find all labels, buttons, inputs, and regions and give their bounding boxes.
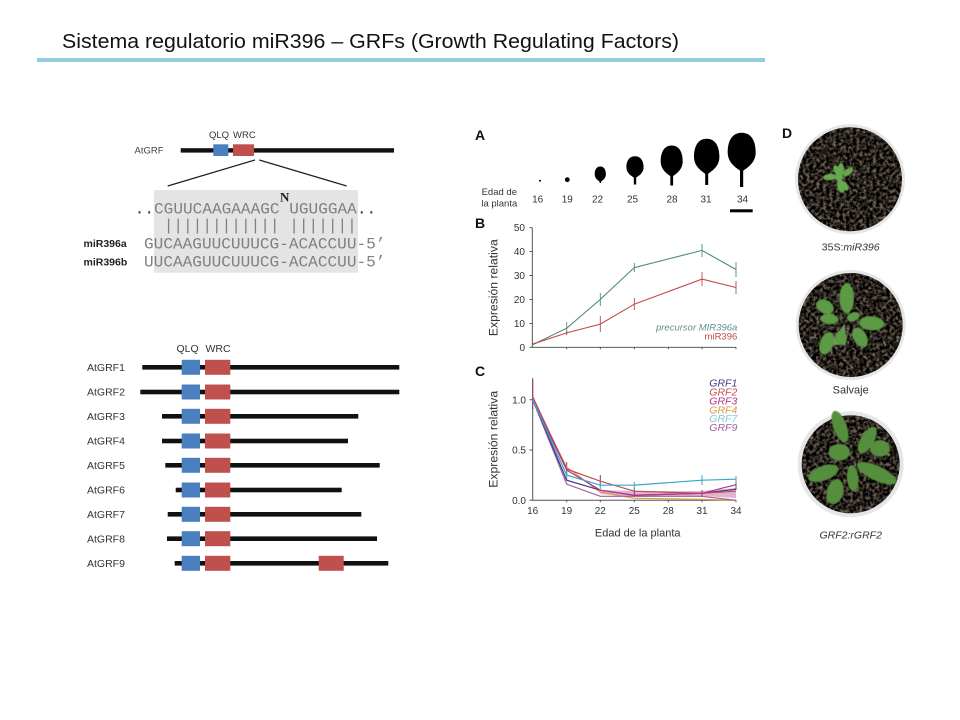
miR396a sequence: GUCAAGUUCUUUCG-ACACCUU-5’ — [144, 235, 385, 253]
age labels: 25 — [627, 195, 638, 206]
age labels — [532, 195, 748, 206]
y tick labels: 50 — [514, 223, 525, 234]
x tick labels — [527, 506, 742, 517]
target sequence: ..CGUUCAAGAAAGC UGUGGAA.. — [135, 200, 376, 218]
row AtGRF5: AtGRF5 — [87, 460, 125, 472]
scale bar — [730, 209, 753, 212]
caption: 35S:miR396: 35S:miR396 — [822, 242, 880, 254]
axis title: Expresión relativa — [486, 239, 500, 336]
row AtGRF1 — [87, 360, 399, 375]
age labels: 22 — [592, 195, 603, 206]
photo: wild type plant — [795, 270, 907, 380]
title underline — [37, 58, 765, 62]
panel C: line chart — [475, 363, 742, 540]
legend: GRF4 — [709, 404, 737, 416]
y tick labels: 40 — [514, 247, 525, 258]
age axis title: la planta — [481, 199, 518, 210]
panel A: leaf size series — [475, 127, 756, 212]
age axis title: Edad de — [482, 187, 517, 198]
legend: GRF2 — [709, 387, 737, 399]
photo: 35S:miR396 plant — [795, 124, 905, 234]
row AtGRF3: AtGRF3 — [87, 411, 125, 423]
series GRF1 — [533, 400, 736, 495]
axes — [530, 228, 736, 349]
y tick labels: 30 — [514, 271, 525, 282]
legend: GRF9 — [709, 422, 737, 434]
y tick labels: 0.0 — [512, 496, 526, 507]
row AtGRF2: AtGRF2 — [87, 386, 125, 398]
WRC domain — [233, 144, 254, 156]
axes — [530, 380, 736, 502]
row AtGRF4: AtGRF4 — [87, 436, 125, 448]
age labels: 16 — [532, 195, 544, 206]
miR396b sequence: UUCAAGUUCUUUCG-ACACCUU-5’ — [144, 254, 385, 272]
row AtGRF4 — [87, 434, 348, 448]
age labels: 19 — [562, 195, 573, 206]
series GRF3 — [533, 400, 736, 495]
x tick labels: 25 — [629, 506, 640, 517]
x tick labels: 22 — [595, 506, 606, 517]
title: Sistema regulatorio miR396 – GRFs (Growth Regulating Factors) — [62, 30, 679, 53]
photo: GRF2:rGRF2 plant — [795, 409, 907, 520]
row AtGRF9 — [87, 556, 388, 571]
panel D: plant photos — [782, 124, 907, 541]
x tick labels: 34 — [730, 506, 742, 517]
axis title: Expresión relativa — [486, 391, 500, 488]
letter C: C — [475, 363, 485, 379]
legend: GRF7 — [709, 413, 738, 425]
series GRF2 — [533, 397, 736, 493]
y tick labels: 10 — [514, 319, 525, 330]
domain headers: WRC — [206, 343, 231, 355]
domain headers: QLQ — [176, 343, 199, 355]
x tick labels: 31 — [696, 506, 708, 517]
panel: AtGRF family domain diagram — [87, 343, 399, 571]
row AtGRF9: AtGRF9 — [87, 558, 125, 570]
domain labels: QLQ — [209, 130, 229, 141]
gene line — [181, 148, 394, 153]
shaded overlap between series — [600, 488, 736, 498]
caption: Salvaje: Salvaje — [833, 384, 869, 396]
N marker: N — [280, 190, 290, 204]
row AtGRF7: AtGRF7 — [87, 509, 125, 521]
label: AtGRF: AtGRF — [134, 146, 164, 156]
leaves by plant age — [539, 133, 756, 187]
row AtGRF1: AtGRF1 — [87, 362, 125, 374]
QLQ domain — [213, 144, 228, 156]
row AtGRF2 — [87, 384, 399, 400]
y tick labels — [512, 396, 526, 507]
miR396b label: miR396b — [84, 256, 127, 268]
panel: AtGRF target site — [84, 130, 394, 273]
legend: precursor MIR396a: precursor MIR396a — [655, 322, 737, 333]
caption: GRF2:rGRF2: GRF2:rGRF2 — [819, 529, 882, 541]
y tick labels: 20 — [514, 295, 525, 306]
age labels: 31 — [700, 195, 712, 206]
series: miR396 — [532, 272, 736, 344]
panel B: line chart — [475, 215, 737, 354]
series GRF7 — [533, 400, 736, 485]
row AtGRF5 — [87, 458, 380, 473]
y tick labels: 0 — [519, 343, 525, 354]
x axis title: Edad de la planta — [595, 528, 681, 540]
row AtGRF8: AtGRF8 — [87, 534, 125, 546]
row AtGRF3 — [87, 409, 358, 424]
x tick labels: 19 — [561, 506, 573, 517]
legend — [709, 378, 738, 434]
row AtGRF8 — [87, 531, 377, 546]
zoom lines — [168, 160, 347, 186]
row AtGRF6 — [87, 482, 342, 498]
miR396a label: miR396a — [84, 238, 127, 250]
legend: GRF3 — [709, 395, 737, 407]
error bars: cyan series — [567, 470, 736, 489]
y tick labels: 0.5 — [512, 446, 526, 456]
base pairing bars: |||||||||||| ||||||| — [164, 217, 357, 235]
y tick labels — [514, 223, 525, 354]
letter D: D — [782, 125, 792, 141]
age labels: 28 — [666, 195, 678, 206]
domain labels: WRC — [233, 130, 256, 141]
age labels: 34 — [737, 195, 748, 206]
series GRF9 — [533, 400, 736, 500]
series GRF4 — [533, 400, 736, 500]
y tick labels: 1.0 — [512, 396, 526, 406]
letter B: B — [475, 215, 485, 231]
x tick labels: 28 — [663, 506, 674, 517]
row AtGRF6: AtGRF6 — [87, 484, 125, 496]
legend: GRF1 — [709, 378, 737, 390]
letter A: A — [475, 127, 485, 143]
sequence background — [154, 190, 358, 273]
error bars: magenta and red series — [533, 378, 736, 497]
series: precursor MIR396a — [532, 244, 736, 345]
row AtGRF7 — [87, 507, 361, 522]
legend: miR396: miR396 — [705, 331, 737, 342]
x tick labels: 16 — [527, 506, 539, 517]
